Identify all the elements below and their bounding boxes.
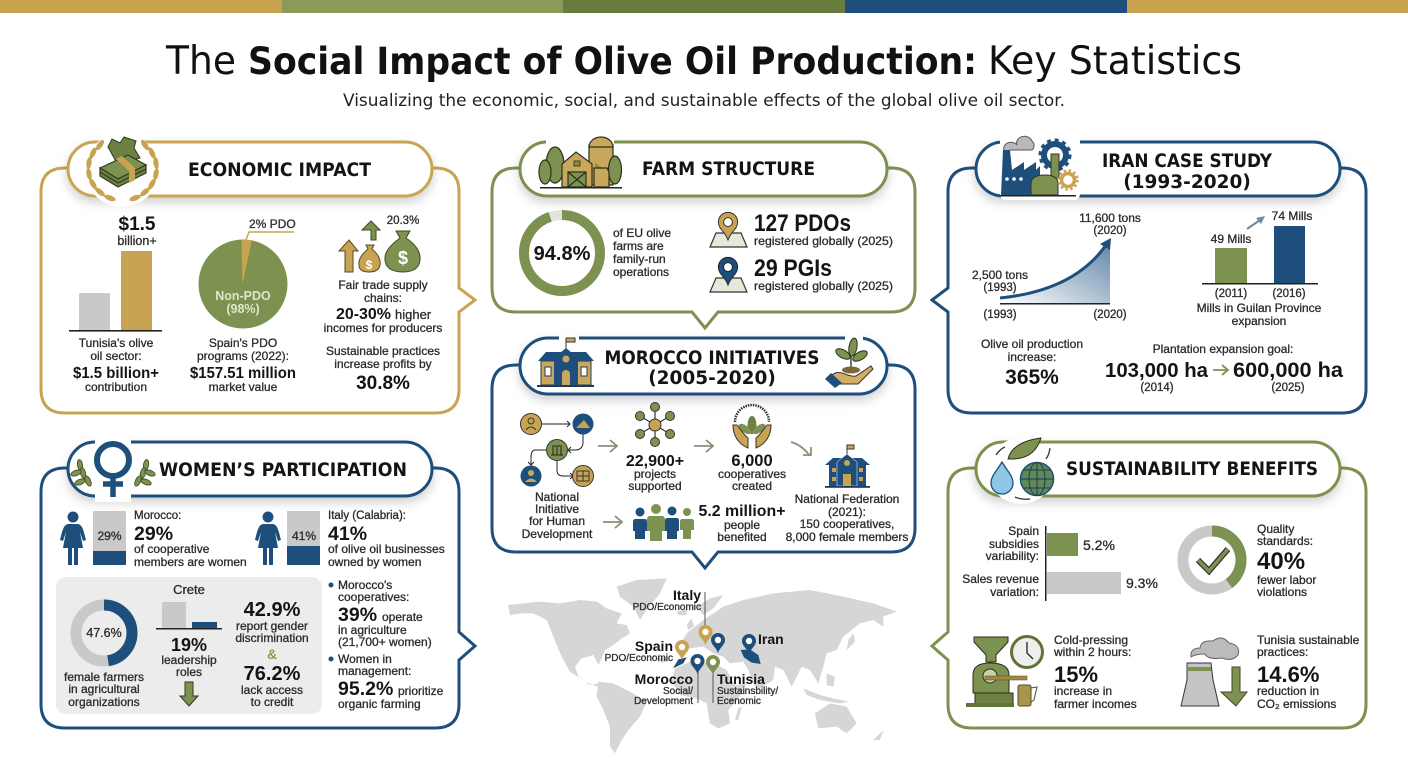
bar chart: variability: variability: — [986, 549, 1039, 563]
map labels and pins: PDO/Economic — [633, 602, 701, 613]
text: Tunisia sustainable — [1257, 633, 1360, 711]
line chart: production: (2020) — [1093, 225, 1127, 237]
bar chart: mills: Mills in Guilan Province — [1197, 301, 1322, 315]
stat: 29 PGIs: 29 PGIs — [754, 255, 832, 282]
bullet: women in management: management: — [338, 664, 411, 678]
heading: WOMEN’S PARTICIPATION — [159, 460, 407, 481]
text: sustainable profits: Sustainable practices — [326, 344, 440, 358]
text: fair trade: 20-30% — [336, 306, 391, 323]
map labels and pins: Social/ — [663, 686, 693, 697]
stat: 6,000: cooperatives — [718, 467, 786, 481]
map labels and pins: Tunisia — [717, 671, 765, 687]
arrow — [791, 442, 811, 456]
stats: discrimination and credit: discrimination — [235, 631, 309, 645]
heading: (2005-2020) — [648, 368, 776, 389]
arrow — [603, 516, 622, 528]
title: The — [165, 39, 236, 84]
pie chart: PDO — [198, 217, 296, 328]
stat: Morocco 29%: 29% — [97, 529, 122, 543]
stat: 365%: increase: — [1008, 350, 1056, 364]
icon: money bags and arrows — [339, 215, 420, 272]
text: Tunisia sustainable: reduction in — [1257, 684, 1319, 698]
donut: 94.8% family-run: 94.8% — [534, 243, 591, 265]
text: cold pressing: Cold-pressing — [1054, 633, 1128, 647]
stat: 5.2 million+: people — [724, 518, 760, 532]
text: sustainable profits: increase profits by — [334, 357, 432, 371]
map labels and pins: Sustainsbility/ — [717, 686, 778, 697]
text: cold pressing: farmer incomes — [1054, 697, 1137, 711]
icon: cooling tower and down arrow — [1181, 638, 1247, 706]
icon: people — [633, 504, 694, 541]
title: Social Impact of Olive Oil Production: — [248, 40, 977, 83]
text: National Federation: National Federation — [795, 492, 899, 506]
map labels and pins: PDO/Economic — [605, 653, 673, 664]
text: quality standards: violations — [1257, 585, 1307, 599]
map labels and pins: Development — [634, 696, 693, 707]
line chart: production: (2020) — [1093, 309, 1127, 321]
heading: IRAN CASE STUDY — [1102, 151, 1273, 172]
heading: MOROCCO INITIATIVES — [604, 348, 820, 369]
bar chart: mills: 74 Mills — [1272, 209, 1312, 223]
subtitle: Visualizing the economic, social, and sustainable effects of the global olive oil sector. — [343, 91, 1065, 111]
stats: discrimination and credit: & — [267, 646, 277, 662]
stats: discrimination and credit: 76.2% — [244, 663, 301, 685]
text: Tunisia sustainable: Tunisia sustainable — [1257, 633, 1360, 647]
text: fair trade: Fair trade supply — [338, 278, 428, 292]
bullet: Morocco's cooperatives: cooperatives: — [338, 590, 409, 604]
donut: 47.6% — [64, 605, 144, 709]
donut: quality standards — [1183, 531, 1241, 589]
arrow — [694, 440, 713, 452]
stat: Italy 41% — [255, 510, 445, 569]
text: quality standards: 40% — [1257, 548, 1305, 575]
stat: 6,000: 6,000 — [731, 452, 773, 470]
text: quality standards: fewer labor — [1257, 573, 1316, 587]
stats: discrimination and credit: report gender — [236, 619, 308, 633]
icon: money bags and arrows: $ — [398, 248, 408, 268]
title — [165, 39, 1242, 84]
text: Spain PDO — [190, 336, 296, 394]
text: Tunisia — [73, 336, 159, 394]
icon: venus symbol with sprigs — [70, 436, 156, 502]
text: National Initiative: Initiative — [535, 502, 579, 516]
stat: plantation expansion — [1105, 342, 1344, 394]
panel: Crete — [56, 577, 322, 714]
text: National Initiative: National — [535, 490, 579, 504]
chart: Crete leadership: leadership — [161, 653, 217, 667]
bar chart: variability: 5.2% — [1083, 537, 1115, 553]
text: family-run: farms are — [613, 239, 664, 253]
stat: Morocco 29%: Morocco: — [134, 510, 181, 522]
bullet: Morocco's cooperatives — [328, 578, 432, 649]
stat: 127 PDOs — [710, 210, 893, 248]
bar chart: variability: subsidies — [989, 537, 1039, 551]
text: family-run: of EU olive — [613, 226, 671, 240]
text: fair trade: chains: — [364, 291, 402, 305]
text: sustainable profits — [326, 344, 440, 394]
donut: 47.6%: in agricultural — [68, 682, 140, 696]
stat: Italy 41%: owned by women — [328, 555, 421, 569]
map labels and pins: Iran — [758, 631, 784, 647]
text: quality standards: Quality — [1257, 522, 1294, 536]
bullet: Morocco's cooperatives: operate — [382, 610, 423, 624]
bullet: Morocco's cooperatives: (21,700+ women) — [338, 635, 432, 649]
header: women's participation — [68, 442, 432, 496]
bullet: women in management: 95.2% — [338, 678, 393, 700]
heading: (1993-2020) — [1123, 172, 1251, 193]
pie chart: PDO: (98%) — [226, 302, 260, 316]
text: Spain PDO: programs (2022): — [197, 349, 289, 363]
heading: ECONOMIC IMPACT — [188, 160, 371, 181]
pie chart: PDO: 2% PDO — [249, 217, 296, 231]
icon: federation building — [825, 445, 870, 488]
bar chart: variability: Spain — [1008, 524, 1039, 538]
stat: plantation expansion: (2025) — [1271, 382, 1305, 394]
text: Tunisia: Tunisia's olive — [79, 336, 154, 350]
icon: hand with seedling — [825, 337, 873, 388]
map labels and pins: Italy — [673, 587, 701, 603]
line chart: production: (1993) — [983, 282, 1017, 294]
map labels and pins: Ecenomic — [717, 696, 761, 707]
panel: women's participation — [41, 436, 475, 728]
stat: plantation expansion: 600,000 ha — [1233, 358, 1344, 382]
text: Tunisia sustainable: 14.6% — [1257, 662, 1319, 687]
text: National Federation: (2021): — [828, 505, 866, 519]
text: Tunisia: contribution — [85, 380, 147, 394]
text: family-run: family-run — [613, 252, 666, 266]
bar chart: mills — [1197, 209, 1322, 328]
bar chart: Tunisia: billion+ — [117, 234, 157, 248]
stat: 127 PDOs: 127 PDOs — [754, 210, 851, 237]
text: cold pressing: increase in — [1054, 684, 1112, 698]
stat: plantation expansion: Plantation expansion goal: — [1153, 342, 1293, 356]
bullet: Morocco's cooperatives: 39% — [338, 604, 377, 626]
chart: Crete leadership — [156, 582, 222, 706]
bar chart: mills: (2016) — [1272, 288, 1306, 300]
bar chart: mills: (2011) — [1215, 288, 1247, 300]
text: fair trade: higher — [395, 307, 432, 322]
icon: school building — [537, 334, 863, 387]
text: family-run: operations — [613, 265, 669, 279]
text: cold pressing: 15% — [1054, 662, 1098, 687]
stat: 22,900+ — [626, 453, 684, 493]
header: farm structure — [520, 142, 887, 196]
map labels and pins: Morocco — [635, 671, 693, 687]
text: fair trade: incomes for producers — [324, 321, 442, 335]
stat: 22,900+: supported — [628, 479, 682, 493]
stat: 29 PGIs — [710, 255, 893, 293]
text: National Initiative: Development — [522, 527, 593, 541]
icon: leaf, drop and globe — [988, 438, 1054, 504]
text: National Initiative: for Human — [529, 514, 585, 528]
heading: SUSTAINABILITY BENEFITS — [1066, 459, 1318, 480]
stat: Morocco 29%: of cooperative — [134, 542, 210, 556]
icon: factory and gears — [1000, 134, 1080, 200]
text: cold pressing: within 2 hours: — [1053, 645, 1131, 659]
stat: 6,000 — [718, 452, 786, 493]
bar chart: mills: expansion — [1232, 314, 1286, 328]
text: National Federation — [786, 492, 908, 544]
header: Iran case study — [976, 142, 1340, 196]
heading: FARM STRUCTURE — [642, 159, 815, 180]
text: cold pressing — [1053, 633, 1137, 711]
stats: discrimination and credit: lack access — [241, 683, 303, 697]
header: economic impact — [68, 142, 432, 196]
text: Tunisia: $1.5 billion+ — [73, 365, 159, 382]
icon: money bags and arrows: $ — [366, 258, 373, 272]
flow diagram: National Initiative — [520, 414, 594, 486]
text: sustainable profits: 30.8% — [356, 373, 410, 394]
bar chart: variability: variation: — [990, 585, 1039, 599]
top colour band — [0, 0, 1408, 13]
text: Spain PDO: $157.51 million — [190, 365, 296, 382]
header: sustainability benefits — [976, 442, 1340, 496]
stat: plantation expansion: (2014) — [1140, 382, 1174, 394]
header: Morocco initiatives — [520, 338, 887, 394]
bar chart: Tunisia — [69, 214, 162, 332]
panel: Morocco initiatives — [492, 334, 915, 568]
donut: 94.8% family-run — [524, 215, 600, 291]
stat: Italy 41%: 41% — [328, 523, 367, 545]
world map — [508, 578, 897, 753]
bar chart: Tunisia: $1.5 — [119, 214, 156, 235]
bullet: Morocco's cooperatives: in agriculture — [338, 623, 407, 637]
text: Spain PDO: Spain's PDO — [209, 336, 277, 350]
stat: 365% — [981, 337, 1083, 389]
stat: 22,900+: 22,900+ — [626, 453, 684, 470]
heading — [1102, 151, 1273, 193]
icon: farm — [539, 137, 622, 188]
text: family-run — [613, 226, 671, 279]
line chart: production: (1993) — [983, 309, 1017, 321]
stat: 365%: Olive oil production — [981, 337, 1083, 351]
stat: Italy 41%: of olive oil businesses — [328, 542, 445, 556]
stat: 365%: 365% — [1005, 366, 1059, 389]
stat: 22,900+: projects — [634, 467, 676, 481]
bar chart: variability: 9.3% — [1126, 575, 1158, 591]
line chart: production: 2,500 tons — [972, 268, 1028, 282]
stat: 5.2 million+: benefited — [717, 530, 767, 544]
line chart: production — [972, 211, 1141, 321]
heading — [604, 348, 820, 389]
panel: economic impact — [41, 133, 475, 413]
stats: discrimination and credit: to credit — [251, 695, 294, 709]
stat: Italy 41%: Italy (Calabria): — [328, 510, 406, 522]
text: National Federation: 150 cooperatives, — [800, 517, 894, 531]
donut: 47.6%: 47.6% — [86, 626, 122, 640]
stat: Morocco 29%: 29% — [134, 523, 173, 545]
stat: Morocco 29% — [60, 510, 247, 569]
stats: discrimination and credit: 42.9% — [244, 599, 301, 621]
pie chart: PDO: Non-PDO — [215, 289, 271, 303]
bar chart: mills: 49 Mills — [1211, 232, 1251, 246]
donut: 47.6%: organizations — [68, 695, 140, 709]
text: National Initiative — [522, 490, 593, 541]
stat: 6,000: created — [732, 479, 772, 493]
chart: Crete leadership: 19% — [171, 635, 207, 655]
text: Tunisia sustainable: CO₂ emissions — [1257, 697, 1336, 711]
donut: 47.6%: female farmers — [64, 670, 144, 684]
chart: Crete leadership: roles — [176, 665, 202, 679]
text: quality standards — [1257, 522, 1316, 599]
bullet: women in management: Women in — [338, 652, 392, 666]
stat: 29 PGIs: registered globally (2025) — [754, 279, 893, 293]
text: quality standards: standards: — [1257, 534, 1313, 548]
text: National Federation: 8,000 female members — [786, 530, 908, 544]
map labels and pins: Spain — [635, 638, 673, 654]
text: fair trade — [324, 278, 442, 335]
bullet: women in management: organic farming — [338, 697, 421, 711]
bullet: women in management — [328, 652, 444, 711]
icon: money and laurel — [85, 133, 160, 207]
text: Tunisia: oil sector: — [90, 349, 142, 363]
panel: farm structure — [492, 137, 915, 328]
stat: 5.2 million+ — [698, 503, 786, 544]
stats: discrimination and credit — [235, 599, 309, 709]
chart: Crete leadership: Crete — [173, 582, 205, 597]
text: Spain PDO: market value — [209, 380, 278, 394]
bar chart: variability: Sales revenue — [962, 572, 1039, 586]
arrow — [598, 440, 617, 452]
stat: Morocco 29%: members are women — [134, 555, 247, 569]
panel: sustainability benefits — [932, 438, 1366, 728]
stat: plantation expansion: 103,000 ha — [1105, 359, 1209, 382]
panel: Iran case study — [932, 134, 1366, 413]
icon: money bags and arrows: 20.3% — [387, 215, 419, 227]
icon: cold press and clock — [966, 636, 1042, 707]
icon: hands with leaf — [733, 405, 771, 448]
bar chart: variability — [962, 524, 1158, 601]
stat: 127 PDOs: registered globally (2025) — [754, 234, 893, 248]
icon: network — [636, 402, 674, 446]
bullet: women in management: prioritize — [398, 684, 444, 698]
title: Key Statistics — [988, 39, 1242, 84]
stat: Italy 41%: 41% — [292, 529, 316, 543]
map labels and pins — [605, 587, 784, 707]
text: Tunisia sustainable: practices: — [1257, 645, 1308, 659]
line chart: production: 11,600 tons — [1079, 211, 1141, 225]
stat: 5.2 million+: 5.2 million+ — [698, 503, 786, 520]
bullet: Morocco's cooperatives: Morocco's — [338, 578, 392, 592]
